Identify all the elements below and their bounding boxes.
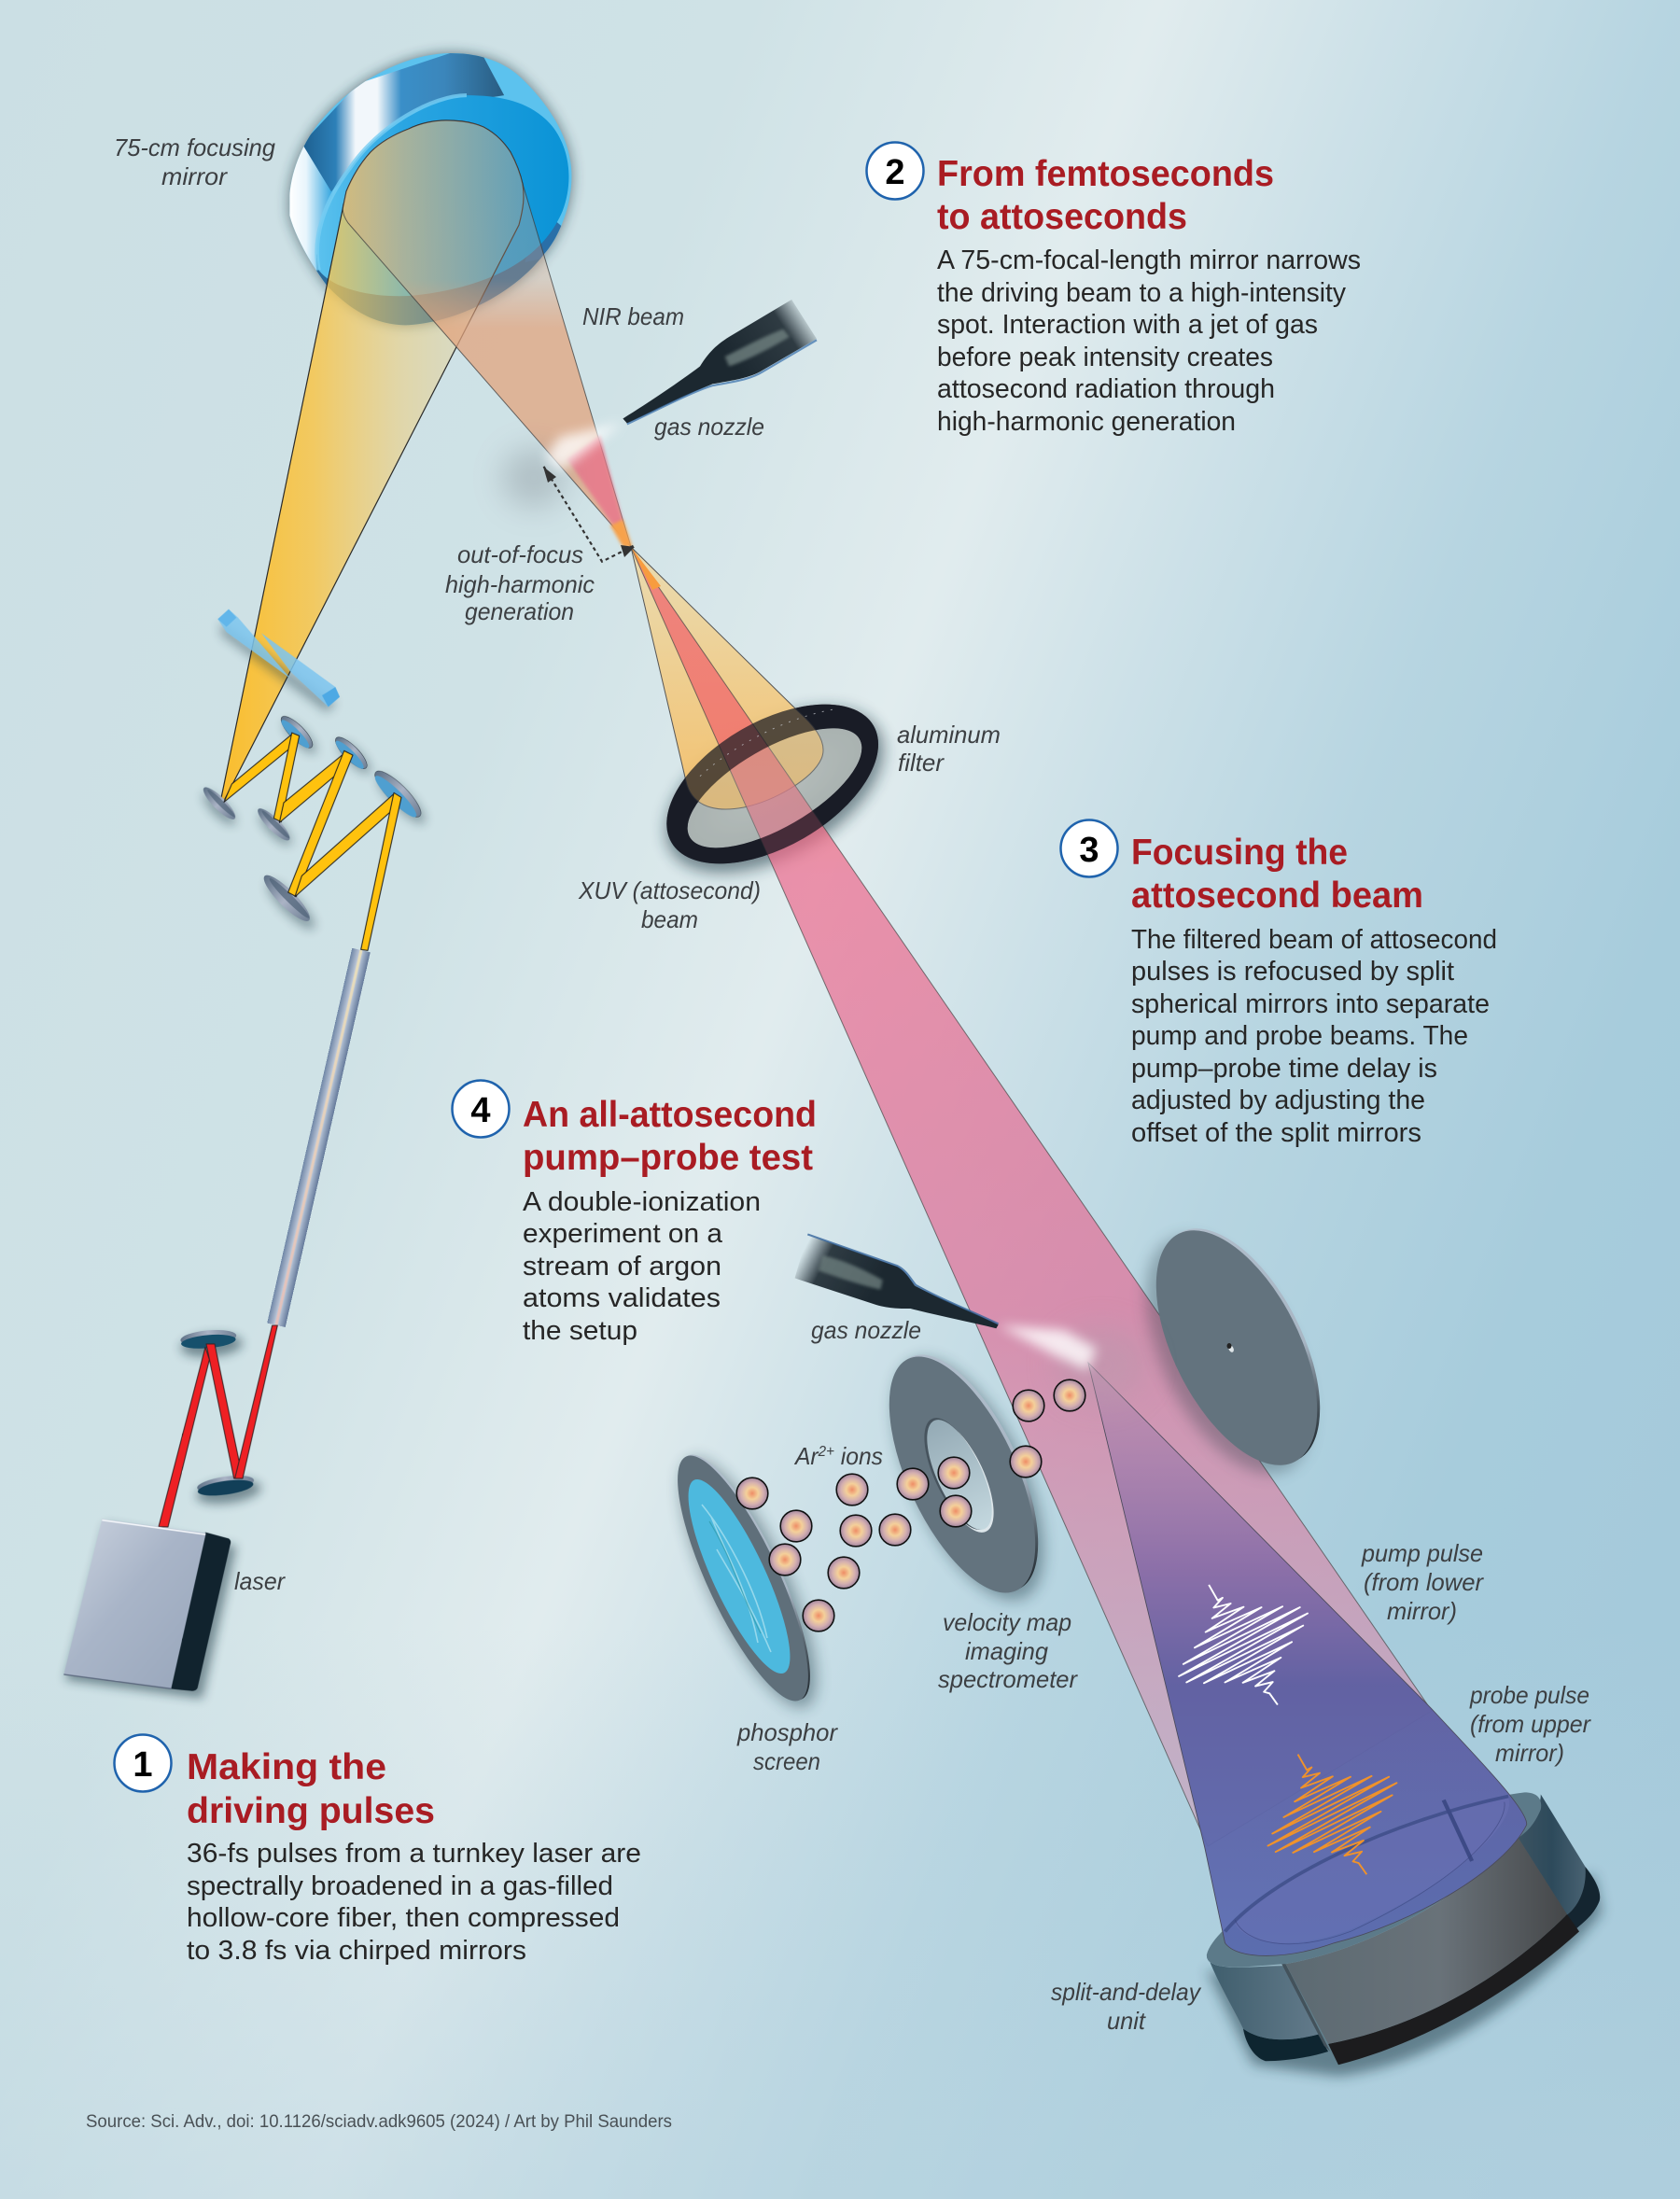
- icon: number badge 4: [452, 1081, 510, 1137]
- beam: attosecond onset near focus: [567, 435, 633, 547]
- text block: step 3: adjusted by adjusting the: [1131, 1085, 1425, 1115]
- label: split-and-delay unit: split-and-delay: [1051, 1978, 1202, 2006]
- heading: step 2: [937, 154, 1274, 237]
- label: pump pulse: mirror): [1387, 1597, 1457, 1625]
- label: XUV beam: beam: [641, 905, 698, 933]
- heading: step 2: From femtoseconds: [937, 154, 1274, 194]
- text block: step 1: 36-fs pulses from a turnkey laser are: [187, 1839, 641, 1869]
- icon: steering mirrors and laser: [63, 1325, 277, 1699]
- beam: NIR beam outline: [343, 184, 631, 547]
- icon: right glass wedge: [261, 633, 340, 707]
- label: velocity map imaging spectrometer: spectrometer: [938, 1665, 1078, 1693]
- label: XUV beam: [578, 876, 761, 933]
- beam: pump and probe cone: [1088, 1363, 1527, 1955]
- icon: focusing mirror: [275, 42, 592, 341]
- icon: number badge 3: [1060, 819, 1118, 877]
- label: aluminum filter: aluminum: [897, 721, 1001, 749]
- label: split-and-delay unit: [1051, 1978, 1202, 2035]
- arrow: out-of-focus offset: [544, 467, 634, 562]
- label: probe pulse: mirror): [1495, 1739, 1564, 1767]
- beam: red laser beams: [159, 1325, 277, 1527]
- icon: mirror 6: [370, 765, 427, 822]
- text block: step 3: The filtered beam of attosecond: [1131, 925, 1497, 955]
- icon: lower gas nozzle: [795, 1234, 999, 1328]
- text block: step 4: the setup: [523, 1316, 637, 1346]
- label: focusing mirror: 75-cm focusing: [114, 133, 276, 161]
- icon: upper gas nozzle: [623, 300, 817, 424]
- text block: step 3: offset of the split mirrors: [1131, 1118, 1421, 1148]
- text block: step 4: [523, 1187, 761, 1346]
- icon: number badge 4: 4: [470, 1091, 491, 1130]
- text block: step 2: high-harmonic generation: [937, 407, 1236, 437]
- text block: step 4: A double-ionization: [523, 1187, 761, 1217]
- label: laser: laser: [234, 1567, 286, 1595]
- label: phosphor screen: phosphor: [736, 1718, 838, 1746]
- beam: diverging residual NIR cone: [631, 547, 823, 809]
- label: lower gas nozzle: gas nozzle: [811, 1316, 921, 1344]
- text block: step 1: hollow-core fiber, then compressed: [187, 1903, 620, 1933]
- panel: step 4: [452, 1081, 817, 1346]
- label: NIR beam: NIR beam: [582, 302, 684, 330]
- label: velocity map imaging spectrometer: velocity map: [943, 1608, 1071, 1636]
- heading: step 2: to attoseconds: [937, 197, 1187, 237]
- icon: steering mirror top: [180, 1328, 237, 1351]
- label: Ar2+ ions: Ar: [795, 1442, 819, 1470]
- text block: source credit: Source: Sci. Adv., doi: 10.1126/sciadv.adk9605 (2024) / Art by Phil Saunders: [86, 2112, 672, 2132]
- text block: step 1: [187, 1839, 641, 1966]
- label: probe pulse: [1469, 1681, 1591, 1767]
- icon: Ar2+ ions: [736, 1380, 1085, 1632]
- heading: step 3: Focusing the: [1131, 833, 1348, 873]
- icon: mirror 4: [331, 733, 371, 773]
- label: pump pulse: (from lower: [1364, 1568, 1484, 1596]
- icon: phosphor screen: [654, 1440, 842, 1723]
- icon: hollow-core fiber: [267, 948, 371, 1327]
- label: probe pulse: (from upper: [1470, 1710, 1591, 1738]
- text block: step 4: experiment on a: [523, 1219, 723, 1249]
- heading: step 4: [523, 1095, 817, 1178]
- icon: wedge pair and chirped mirrors: [199, 609, 431, 950]
- icon: steering mirror bottom: [196, 1473, 255, 1498]
- icon: split-and-delay unit: [1207, 1792, 1602, 2077]
- text block: step 2: A 75-cm-focal-length mirror narrows: [937, 245, 1361, 275]
- panel: step 3: [1060, 819, 1497, 1148]
- icon: aluminum filter: [638, 671, 911, 906]
- text block: step 3: [1131, 925, 1497, 1148]
- label: velocity map imaging spectrometer: [938, 1608, 1078, 1693]
- icon: number badge 1: 1: [133, 1745, 153, 1785]
- text block: step 3: pulses is refocused by split: [1131, 957, 1454, 987]
- label: phosphor screen: screen: [753, 1747, 820, 1775]
- beam: XUV attosecond beam: [631, 547, 1432, 1846]
- icon: number badge 2: 2: [885, 153, 905, 192]
- label: split-and-delay unit: unit: [1107, 2007, 1147, 2035]
- chart: white pump pulse waveform: [1179, 1585, 1308, 1705]
- label: XUV beam: XUV (attosecond): [578, 876, 761, 904]
- icon: mirror 2: [254, 805, 294, 845]
- heading: step 3: attosecond beam: [1131, 875, 1423, 916]
- text block: step 4: atoms validates: [523, 1283, 721, 1313]
- label: Ar2+ ions: ions: [834, 1442, 883, 1470]
- beam: focused NIR beam: [343, 120, 631, 547]
- text block: step 3: pump–probe time delay is: [1131, 1054, 1437, 1084]
- heading: step 4: pump–probe test: [523, 1138, 813, 1178]
- arrow: heads of offset arrow: [543, 467, 635, 557]
- label: aluminum filter: filter: [898, 749, 945, 777]
- label: focusing mirror: [114, 133, 276, 190]
- icon: filter ring and foil seen through beams: [666, 705, 879, 871]
- icon: lower gas plume: [999, 1325, 1146, 1402]
- text block: step 3: pump and probe beams. The: [1131, 1021, 1468, 1051]
- icon: mirror 3: [277, 712, 316, 752]
- label: velocity map imaging spectrometer: imaging: [965, 1637, 1049, 1665]
- icon: number badge 3: 3: [1079, 831, 1099, 870]
- icon: mirror 5: [259, 870, 315, 926]
- text block: step 2: the driving beam to a high-intensity: [937, 278, 1346, 308]
- label: pump pulse: [1361, 1539, 1484, 1625]
- panel: step 1: [114, 1734, 641, 1966]
- label: focusing mirror: mirror: [161, 162, 228, 190]
- text block: step 2: spot. Interaction with a jet of gas: [937, 310, 1318, 340]
- text block: step 1: to 3.8 fs via chirped mirrors: [187, 1936, 526, 1966]
- icon: number badge 2: [866, 142, 924, 200]
- label: out-of-focus high-harmonic generation: generation: [465, 597, 574, 625]
- label: out-of-focus high-harmonic generation: high-harmonic: [445, 570, 595, 598]
- beam: zigzag yellow beams: [224, 733, 401, 950]
- heading: step 4: An all-attosecond: [523, 1095, 817, 1135]
- label: Ar2+ ions: 2+: [818, 1444, 834, 1460]
- label: aluminum filter: [897, 721, 1001, 777]
- heading: step 1: Making the: [187, 1747, 386, 1787]
- heading: step 1: [187, 1747, 435, 1831]
- label: phosphor screen: [736, 1718, 838, 1775]
- text block: step 2: [937, 245, 1361, 437]
- icon: velocity map imaging spectrometer: [860, 1334, 1075, 1621]
- chart: orange probe pulse waveform: [1267, 1755, 1396, 1874]
- label: upper gas nozzle: gas nozzle: [654, 413, 764, 441]
- label: out-of-focus high-harmonic generation: out-of-focus: [457, 540, 583, 568]
- text block: step 2: attosecond radiation through: [937, 374, 1275, 404]
- label: probe pulse: probe pulse: [1469, 1681, 1589, 1709]
- text block: step 2: before peak intensity creates: [937, 343, 1273, 372]
- heading: step 1: driving pulses: [187, 1791, 435, 1831]
- beam: orange focus spot: [631, 547, 661, 590]
- icon: aperture disc: [1112, 1204, 1353, 1500]
- icon: left glass wedge: [217, 609, 296, 684]
- icon: gas plume at focus: [502, 423, 623, 508]
- text block: step 4: stream of argon: [523, 1252, 721, 1282]
- panel: step 2: [866, 142, 1361, 437]
- text block: step 3: spherical mirrors into separate: [1131, 989, 1490, 1019]
- text block: step 1: spectrally broadened in a gas-filled: [187, 1871, 613, 1901]
- icon: mirror 1: [200, 783, 239, 823]
- icon: number badge 1: [114, 1734, 172, 1792]
- icon: laser side face: [171, 1533, 231, 1691]
- icon: laser front face: [63, 1519, 206, 1688]
- label: pump pulse: pump pulse: [1361, 1539, 1483, 1567]
- label: out-of-focus high-harmonic generation: [445, 540, 595, 625]
- heading: step 3: [1131, 833, 1423, 916]
- beam: driving NIR yellow beam: [221, 120, 524, 801]
